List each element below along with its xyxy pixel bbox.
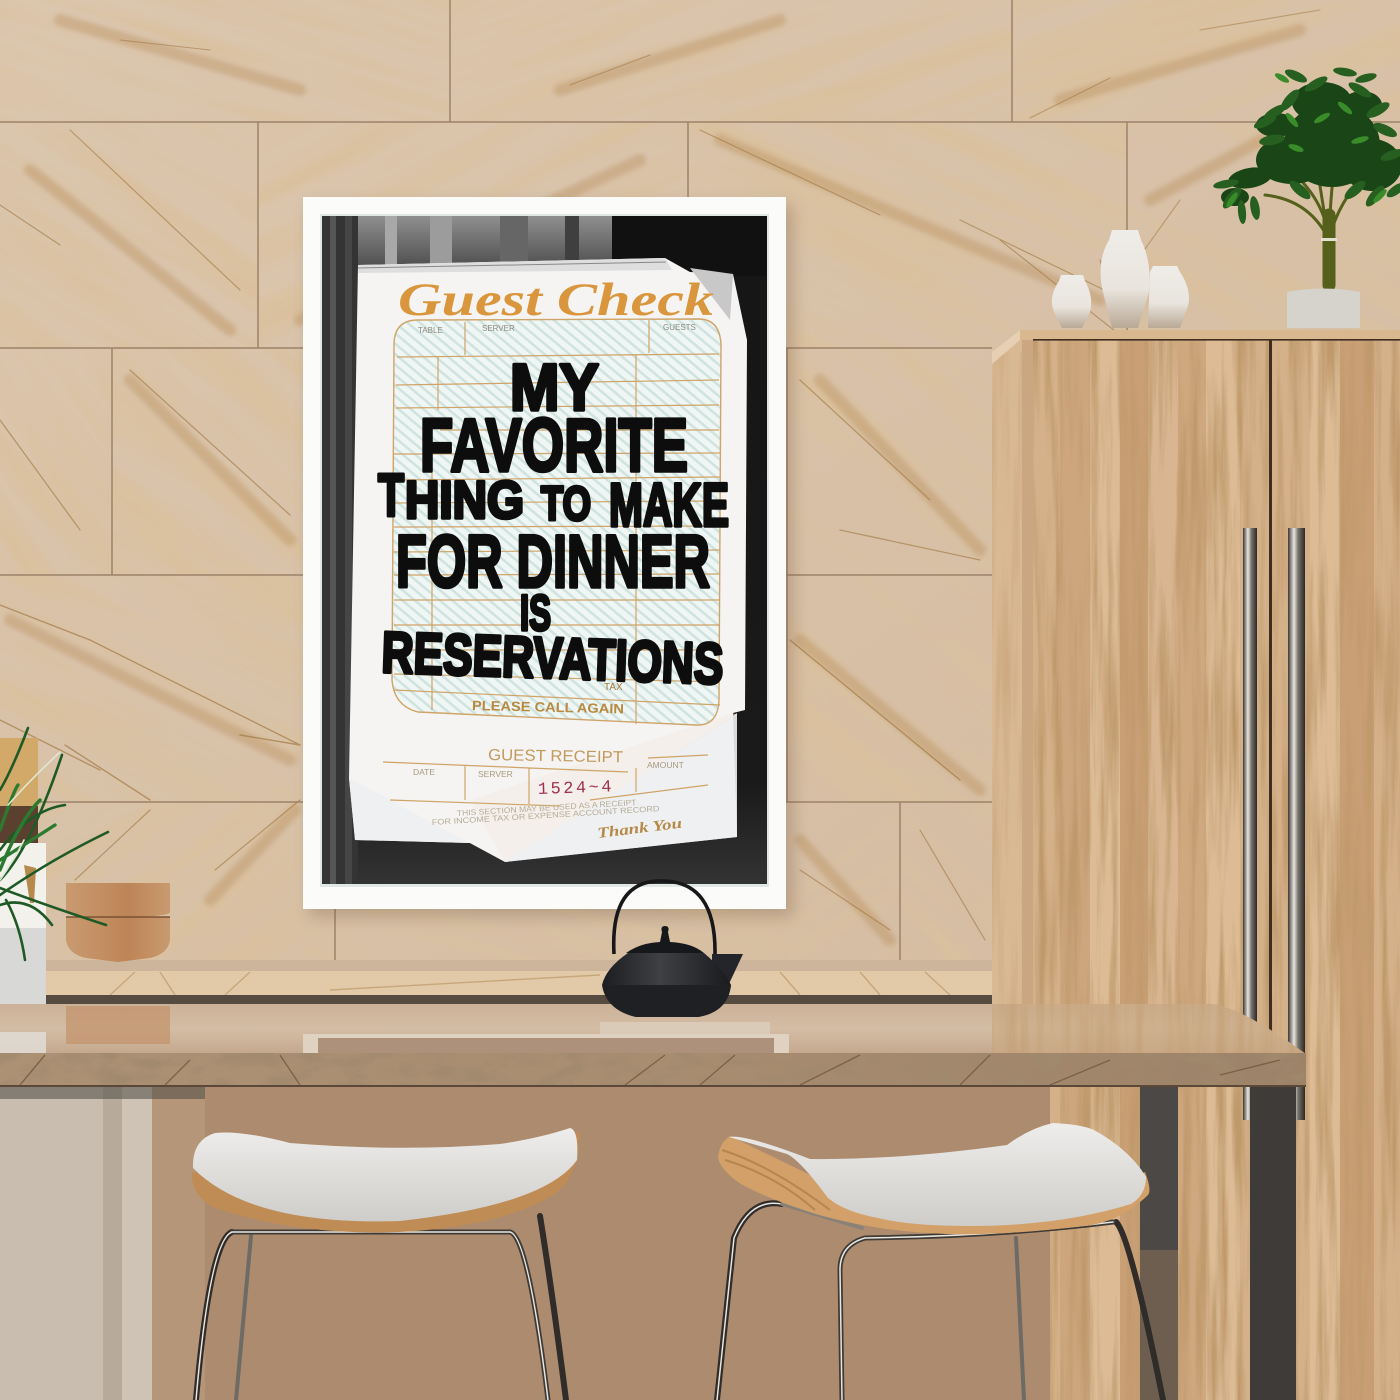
plant stems xyxy=(1265,120,1370,285)
right bar stool xyxy=(717,1123,1163,1400)
left bar stool xyxy=(192,1128,579,1400)
teapot handle xyxy=(614,881,715,954)
guest receipt section: AMOUNT xyxy=(647,760,684,770)
headline: My favorite thing to make for dinner is reservations: MAKE xyxy=(609,471,729,539)
curtain stripes xyxy=(322,216,767,884)
footer: please call again: PLEASE CALL AGAIN xyxy=(472,698,624,716)
marble tile wall xyxy=(0,0,1400,960)
potted plant on cabinet xyxy=(1213,66,1400,328)
white jug behind plant xyxy=(0,843,46,931)
left stool wood shell xyxy=(192,1130,579,1232)
guest check paper xyxy=(349,258,747,862)
white plant pot xyxy=(0,928,46,1020)
poster black background xyxy=(322,216,767,884)
guest receipt section: FOR INCOME TAX OR EXPENSE ACCOUNT RECORD xyxy=(432,804,660,827)
headline: My favorite thing to make for dinner is reservations: HING xyxy=(405,471,524,530)
refrigerator wood cabinet xyxy=(992,330,1400,1400)
guest receipt section: 1524~4 xyxy=(538,778,614,800)
cabinet top lip xyxy=(1020,330,1400,340)
kitchen island countertop xyxy=(0,1004,1306,1087)
teapot spout xyxy=(712,954,743,990)
frame inner bevel xyxy=(320,214,769,887)
teapot body xyxy=(602,953,731,1017)
right stool legs xyxy=(717,1203,1163,1400)
wooden board xyxy=(0,738,38,806)
left stool legs xyxy=(196,1216,566,1400)
right door handle xyxy=(1288,528,1305,1120)
order form grid xyxy=(392,319,721,725)
guest receipt section: DATE xyxy=(413,767,435,777)
cabinet reflection tint xyxy=(992,1004,1306,1054)
guest receipt section: SERVER xyxy=(478,769,513,779)
guest receipt section: GUEST RECEIPT xyxy=(488,747,623,766)
vases on cabinet xyxy=(1052,230,1189,328)
lower wall and base xyxy=(0,1085,1296,1400)
order form grid: SERVER xyxy=(482,324,515,333)
order form grid: TAX xyxy=(604,682,623,693)
left stool cushion xyxy=(193,1128,577,1221)
left grey cabinet xyxy=(0,1085,105,1400)
headline: My favorite thing to make for dinner is reservations: FOR DINNER xyxy=(396,520,710,603)
tall centre vase xyxy=(1101,230,1150,328)
black cast iron teapot xyxy=(602,881,743,1017)
headline: My favorite thing to make for dinner is reservations: FAVORITE xyxy=(420,403,688,487)
poster frame reflection xyxy=(303,1034,789,1054)
dark gap under counter xyxy=(1140,1085,1178,1400)
door seam xyxy=(1269,339,1272,1400)
headline: My favorite thing to make for dinner is reservations: MY xyxy=(510,350,599,424)
left side kitchen objects xyxy=(0,728,170,1020)
cabinet doors xyxy=(1033,340,1400,1400)
countertop surface xyxy=(0,1004,1306,1054)
right stool wood shell xyxy=(718,1136,1149,1234)
heading: Guest Check: Guest Check xyxy=(398,274,715,326)
cabinet side panel xyxy=(992,330,1035,1010)
white frame xyxy=(303,197,786,909)
plant pot xyxy=(1287,288,1360,328)
order form grid: GUESTS xyxy=(663,323,696,332)
headline: My favorite thing to make for dinner is reservations: TO xyxy=(541,478,591,531)
guest receipt section xyxy=(383,747,708,842)
left door handle xyxy=(1243,528,1257,1120)
green leaves xyxy=(0,728,108,960)
order form grid: TABLE xyxy=(418,326,443,335)
right stool cushion xyxy=(729,1123,1146,1226)
countertop front edge xyxy=(0,1053,1306,1086)
right vase xyxy=(1148,266,1189,328)
pot reflection xyxy=(0,1032,46,1054)
headline: My favorite thing to make for dinner is reservations: RESERVATIONS xyxy=(381,620,725,697)
bowl reflection xyxy=(66,1006,170,1044)
back counter shelf xyxy=(46,960,1016,1004)
headline: My favorite thing to make for dinner is reservations: IS xyxy=(520,585,551,641)
plant foliage xyxy=(1213,66,1400,224)
headline: My favorite thing to make for dinner is reservations: T xyxy=(378,462,404,529)
guest receipt section: Thank You xyxy=(597,816,683,842)
tile grout lines xyxy=(0,0,1400,962)
headline: My favorite thing to make for dinner is reservations xyxy=(378,350,729,697)
tan base wall xyxy=(205,1085,1050,1400)
frame drop shadow xyxy=(309,205,793,917)
teapot lid and knob xyxy=(626,926,704,953)
wooden bowls xyxy=(66,883,170,962)
small left vase xyxy=(1052,275,1091,328)
guest receipt section: THIS SECTION MAY BE USED AS A RECEIPT xyxy=(457,798,637,818)
framed poster xyxy=(303,197,793,917)
